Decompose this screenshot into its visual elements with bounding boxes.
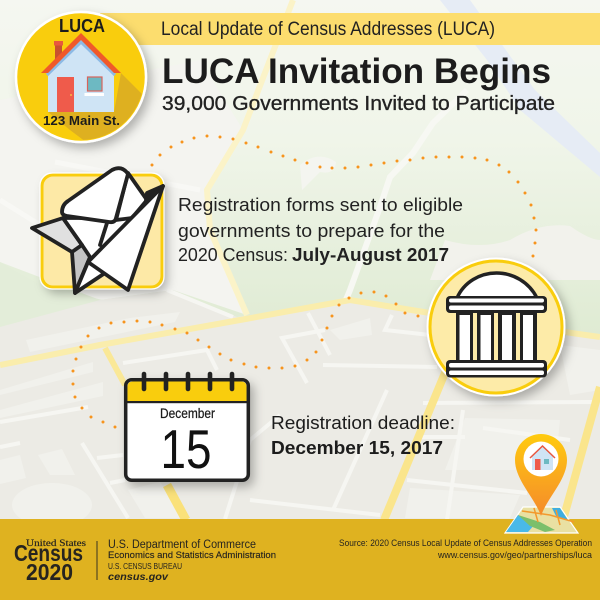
text: registration forms: Registration forms sent to eligible [178, 195, 463, 215]
pin house [530, 446, 555, 470]
badge label: LUCA [59, 16, 105, 36]
icon: government building [428, 258, 564, 396]
header band text: Local Update of Census Addresses (LUCA) [161, 19, 495, 40]
yellow roads [0, 300, 600, 520]
footer source text [339, 538, 593, 561]
footer department text [108, 539, 276, 583]
house shadow [48, 73, 142, 140]
building blocks [0, 312, 600, 527]
icon: map with location pin [505, 434, 578, 533]
calendar day: 15 [160, 418, 212, 480]
river [440, 0, 600, 177]
text: registration forms: governments to prepare for the [178, 221, 445, 241]
text: registration forms: 2020 Census: [178, 245, 288, 265]
text: registration deadline [271, 412, 455, 458]
badge: LUCA house [16, 12, 160, 160]
text: registration deadline: December 15, 2017 [271, 437, 443, 458]
footer logo: Census 2020: Census [14, 540, 83, 566]
dotted route: lower [73, 292, 418, 427]
footer logo: Census 2020 [14, 539, 86, 585]
icon: house [41, 33, 121, 112]
badge address: 123 Main St. [43, 114, 120, 128]
text: registration deadline: Registration deadline: [271, 412, 455, 433]
dotted route: upper [152, 136, 536, 256]
icon: envelope and paper plane [32, 168, 164, 293]
folded map [505, 507, 578, 533]
footer divider [96, 541, 98, 580]
footer logo: Census 2020: United States [26, 539, 86, 549]
title: LUCA Invitation Begins [162, 52, 551, 91]
text: registration forms [178, 195, 463, 265]
icon: calendar [126, 374, 248, 480]
footer department text: Economics and Statistics Administration [108, 550, 276, 561]
header band [100, 13, 600, 45]
footer department text: U.S. CENSUS BUREAU [108, 562, 182, 571]
footer band [0, 519, 600, 600]
footer source text: www.census.gov/geo/partnerships/luca [437, 550, 593, 561]
calendar month: December [160, 406, 215, 421]
text: registration forms: July-August 2017 [292, 245, 449, 265]
footer department text: U.S. Department of Commerce [108, 539, 256, 551]
footer logo: Census 2020: 2020 [26, 559, 73, 585]
subtitle: 39,000 Governments Invited to Participate [162, 92, 555, 115]
streets [0, 290, 593, 520]
footer department text: census.gov [108, 571, 169, 583]
